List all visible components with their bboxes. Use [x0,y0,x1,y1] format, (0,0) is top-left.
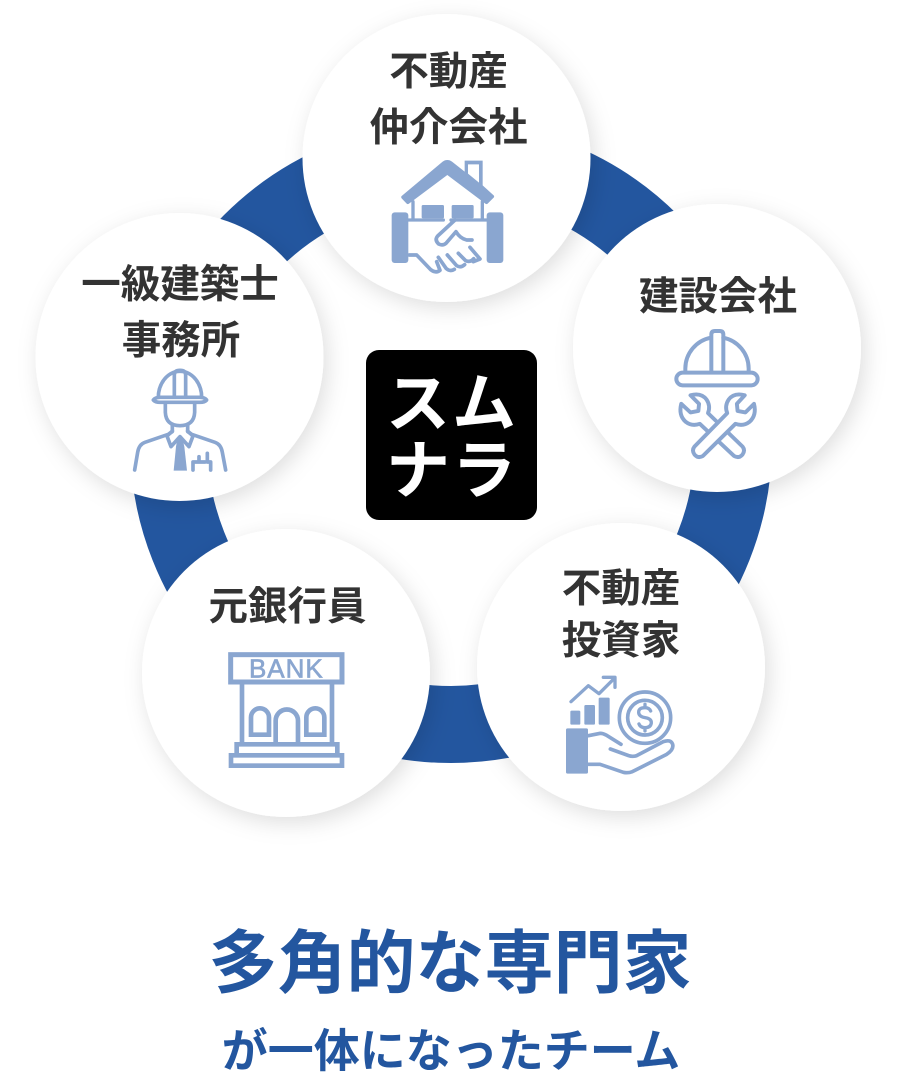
title: 多角的な専門家: 多角的な専門家 [208,925,692,1002]
heading: 建設会社: 建設会社 [639,275,797,319]
icon: bank: BANK [249,653,324,683]
logo: スムナラ: スム [386,368,518,440]
heading: 不動産投資家: 不動産 [562,567,680,611]
icon: helmet and wrenches [676,331,758,457]
icon: bank [231,653,342,766]
heading: 一級建築士事務所: 事務所 [122,319,240,363]
panel: 一級建築士事務所 [36,213,324,501]
panel: 建設会社 [573,204,861,492]
heading: 一級建築士事務所: 一級建築士 [81,263,279,307]
blue ring [168,160,734,724]
heading: 不動産投資家: 投資家 [562,619,680,663]
subtitle: が一体になったチーム: が一体になったチーム [222,1025,680,1077]
icon: architect [135,370,226,471]
heading: 不動産仲介会社: 仲介会社 [370,106,528,150]
icon: house and handshake [392,160,503,272]
logo: スムナラ: ナラ [386,435,518,507]
panel: 元銀行員 [142,529,430,817]
icon: hand, coin and chart [566,677,673,774]
logo: スムナラ [366,350,537,520]
panel: 不動産投資家 [477,523,765,811]
heading: 不動産仲介会社: 不動産 [389,50,508,94]
heading: 元銀行員: 元銀行員 [208,585,366,629]
panel: 不動産仲介会社 [302,14,590,302]
